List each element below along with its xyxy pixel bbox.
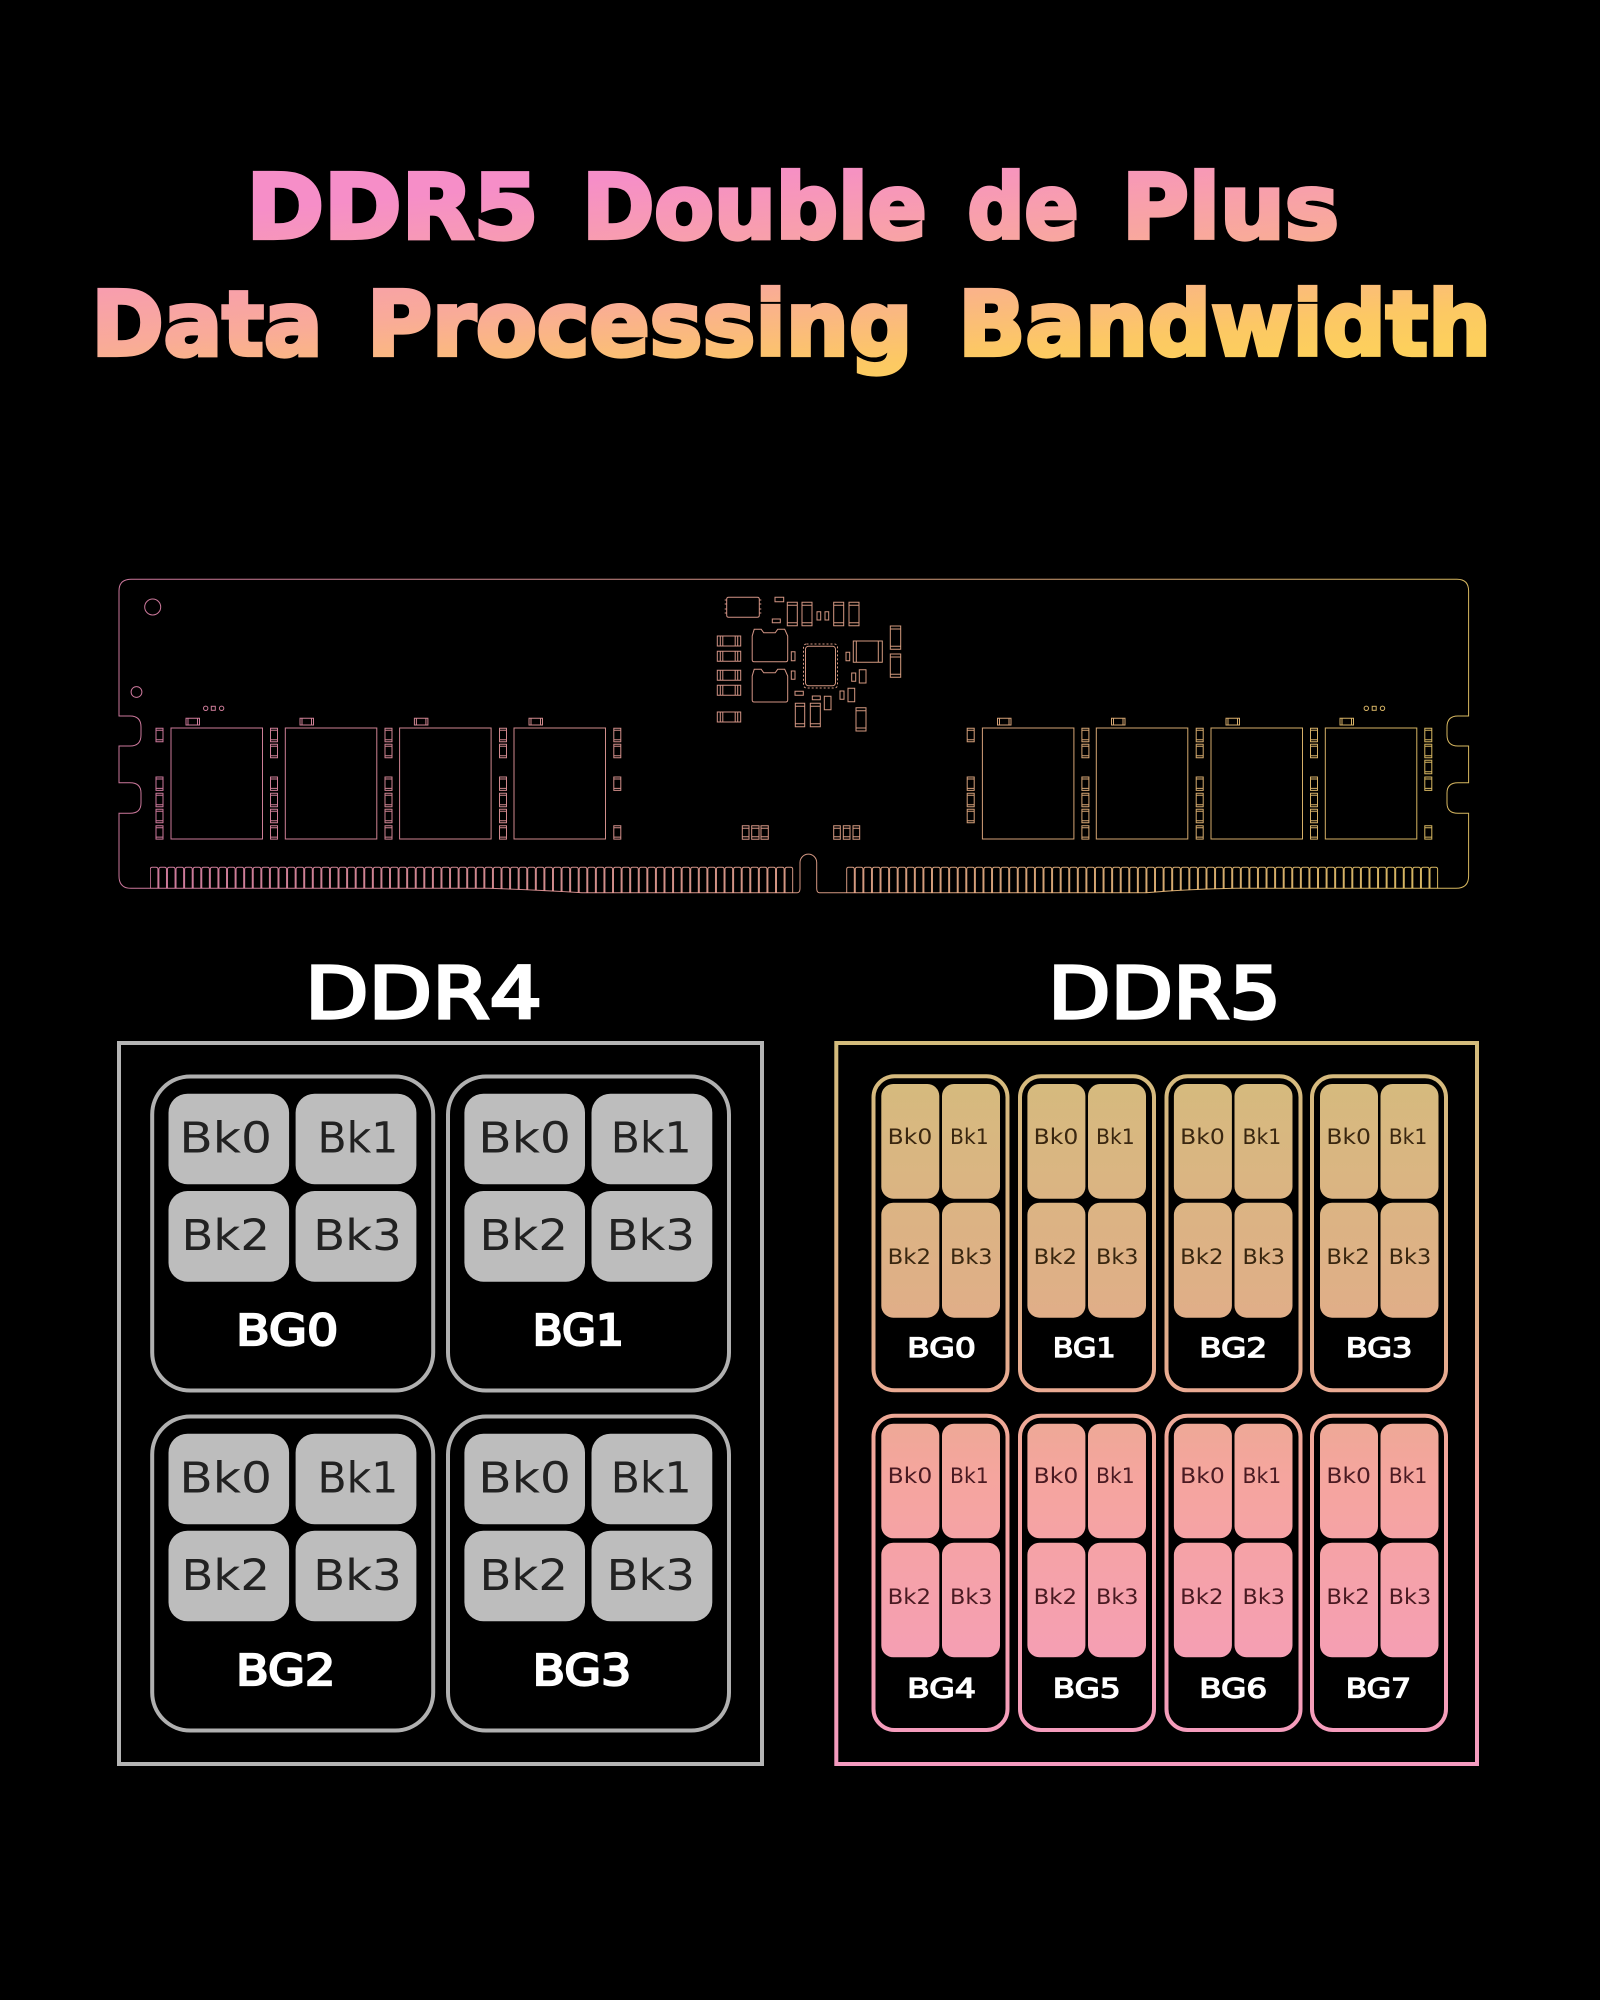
bank: Bk2: Bk2 <box>480 1552 568 1601</box>
label: BG2: BG2 <box>1199 1333 1267 1364</box>
bank: Bk0: Bk0 <box>1180 1125 1225 1150</box>
heading: DDR4: DDR4 <box>305 952 542 1035</box>
bank: Bk0: Bk0 <box>478 1115 571 1164</box>
bank: Bk1 <box>1234 1084 1292 1199</box>
bank: Bk1 <box>942 1424 1000 1538</box>
bank: Bk2 <box>881 1543 939 1657</box>
bank: Bk1 <box>1088 1424 1146 1538</box>
bank: Bk2 <box>881 1203 939 1318</box>
bank: Bk1 <box>592 1434 712 1524</box>
label: BG1: BG1 <box>533 1306 624 1356</box>
right fingers <box>847 867 1438 893</box>
bank: Bk0 <box>1174 1424 1232 1538</box>
power management circuit components <box>717 597 901 731</box>
bank: Bk2: Bk2 <box>1034 1245 1077 1270</box>
title line 2: Processing <box>367 272 912 376</box>
horizontal capacitors <box>717 636 741 722</box>
bank: Bk0 <box>1320 1424 1378 1538</box>
bank: Bk0: Bk0 <box>179 1115 272 1164</box>
PMIC chip <box>804 644 838 688</box>
title <box>92 155 1491 376</box>
label: BG5: BG5 <box>1053 1673 1121 1704</box>
bank: Bk0 <box>1027 1424 1085 1538</box>
right side capacitors <box>967 728 1432 839</box>
bank: Bk2: Bk2 <box>182 1212 270 1261</box>
bank: Bk2: Bk2 <box>1034 1585 1077 1610</box>
bank group: BG3 <box>1312 1076 1446 1390</box>
label: BG0: BG0 <box>236 1306 338 1356</box>
bank group: BG0 <box>152 1076 433 1390</box>
bank group: BG6 <box>1166 1416 1300 1730</box>
memory module outline diagram <box>119 579 1469 893</box>
bank: Bk3 <box>296 1191 416 1282</box>
bank: Bk1 <box>296 1094 416 1184</box>
bank: Bk3 <box>592 1191 712 1282</box>
label: BG0: BG0 <box>907 1333 976 1364</box>
bank: Bk2 <box>1174 1203 1232 1318</box>
title line 1 <box>246 155 1339 259</box>
bank: Bk1 <box>1088 1084 1146 1199</box>
large capacitor <box>853 641 882 662</box>
bank: Bk3: Bk3 <box>950 1245 992 1270</box>
bank: Bk2 <box>464 1531 585 1621</box>
bank: Bk3 <box>1380 1203 1438 1318</box>
bank: Bk1 <box>296 1434 416 1524</box>
bank: Bk2: Bk2 <box>1180 1585 1224 1610</box>
bank: Bk3 <box>1380 1543 1438 1657</box>
bank: Bk3: Bk3 <box>1096 1245 1138 1270</box>
DDR4 frame <box>119 1043 762 1764</box>
bank: Bk3: Bk3 <box>1096 1585 1138 1610</box>
bank: Bk2 <box>168 1191 289 1282</box>
label: BG2: BG2 <box>236 1646 335 1696</box>
panel: DDR4 <box>119 952 762 1764</box>
bank: Bk2: Bk2 <box>888 1245 931 1270</box>
bank: Bk3: Bk3 <box>1242 1585 1285 1610</box>
bank: Bk1: Bk1 <box>1242 1125 1281 1150</box>
bank: Bk1: Bk1 <box>1389 1125 1427 1150</box>
bank group: BG0 <box>874 1076 1008 1390</box>
bank group: BG7 <box>1312 1416 1446 1730</box>
bank: Bk3 <box>296 1531 416 1621</box>
test point dots <box>204 706 1385 710</box>
bank: Bk2: Bk2 <box>1180 1245 1224 1270</box>
DDR5 frame <box>836 1043 1477 1764</box>
heading: DDR5: DDR5 <box>1048 952 1281 1035</box>
bank: Bk3 <box>1234 1203 1292 1318</box>
bank: Bk3: Bk3 <box>607 1552 695 1601</box>
title line 2 <box>92 272 1491 376</box>
bank: Bk3 <box>942 1543 1000 1657</box>
small passives <box>772 597 866 710</box>
bank: Bk0: Bk0 <box>1034 1464 1078 1489</box>
bank group: BG5 <box>1020 1416 1154 1730</box>
bank: Bk1: Bk1 <box>611 1455 692 1504</box>
bank: Bk0: Bk0 <box>1034 1125 1078 1150</box>
bank: Bk0 <box>881 1084 939 1199</box>
bank group: BG1 <box>1020 1076 1154 1390</box>
bank: Bk0 <box>168 1094 289 1184</box>
bank: Bk0 <box>464 1434 585 1524</box>
bank: Bk1 <box>1380 1424 1438 1538</box>
left memory chips <box>171 728 606 839</box>
mounting holes <box>131 599 161 697</box>
bank: Bk1: Bk1 <box>1389 1464 1427 1489</box>
bank: Bk2 <box>1174 1543 1232 1657</box>
tall capacitors <box>787 602 901 731</box>
bank: Bk0: Bk0 <box>1326 1464 1371 1489</box>
right memory chips <box>982 728 1417 839</box>
bank: Bk0 <box>168 1434 289 1524</box>
gold contact fingers <box>150 867 1438 893</box>
bank: Bk3: Bk3 <box>1389 1585 1431 1610</box>
bank group: BG2 <box>1166 1076 1300 1390</box>
panel: DDR5 <box>836 952 1477 1764</box>
PCB board outline <box>119 579 1469 893</box>
bank: Bk2 <box>1320 1543 1378 1657</box>
title line 2: Bandwidth <box>958 272 1491 376</box>
bank: Bk3: Bk3 <box>313 1552 402 1601</box>
bank: Bk0: Bk0 <box>888 1125 932 1150</box>
bank: Bk1 <box>942 1084 1000 1199</box>
bank: Bk0 <box>464 1094 585 1184</box>
label: BG1: BG1 <box>1053 1333 1116 1364</box>
bank: Bk0: Bk0 <box>478 1455 571 1504</box>
label: BG3: BG3 <box>533 1646 631 1696</box>
bottom resistor arrays <box>742 826 860 839</box>
bank group: BG2 <box>152 1416 433 1730</box>
bank: Bk2: Bk2 <box>182 1552 270 1601</box>
bank group: BG3 <box>448 1416 729 1730</box>
bank: Bk0: Bk0 <box>179 1455 272 1504</box>
bank: Bk1: Bk1 <box>1242 1464 1281 1489</box>
bank: Bk2 <box>168 1531 289 1621</box>
left fingers <box>150 867 793 893</box>
bank: Bk2: Bk2 <box>480 1212 568 1261</box>
bank: Bk1: Bk1 <box>950 1125 989 1150</box>
bank: Bk2 <box>464 1191 585 1282</box>
bank: Bk0: Bk0 <box>1180 1464 1225 1489</box>
left side capacitors <box>156 728 621 839</box>
bank: Bk1: Bk1 <box>1096 1125 1135 1150</box>
bank: Bk1: Bk1 <box>611 1115 692 1164</box>
label: BG4: BG4 <box>907 1673 976 1704</box>
bank: Bk3: Bk3 <box>607 1212 695 1261</box>
bank: Bk3 <box>1088 1543 1146 1657</box>
bank: Bk2 <box>1027 1203 1085 1318</box>
title line 1: Plus <box>1122 155 1339 259</box>
bank: Bk1: Bk1 <box>318 1115 398 1164</box>
bank: Bk3: Bk3 <box>1242 1245 1285 1270</box>
bank: Bk2 <box>1027 1543 1085 1657</box>
bank: Bk1 <box>592 1094 712 1184</box>
bank: Bk0 <box>1320 1084 1378 1199</box>
bank: Bk0 <box>1174 1084 1232 1199</box>
bank: Bk3: Bk3 <box>950 1585 992 1610</box>
title line 1: de <box>968 155 1078 259</box>
label: BG7: BG7 <box>1346 1673 1411 1704</box>
title line 1: DDR5 <box>246 155 538 259</box>
bank: Bk0 <box>881 1424 939 1538</box>
capacitors above chips <box>186 718 1354 725</box>
bank: Bk1: Bk1 <box>1096 1464 1135 1489</box>
bank: Bk3: Bk3 <box>313 1212 402 1261</box>
bank: Bk3 <box>592 1531 712 1621</box>
bank: Bk2: Bk2 <box>1326 1585 1370 1610</box>
bank: Bk3: Bk3 <box>1389 1245 1431 1270</box>
bank group: BG4 <box>874 1416 1008 1730</box>
bank: Bk3 <box>1234 1543 1292 1657</box>
bank: Bk0 <box>1027 1084 1085 1199</box>
bank: Bk2: Bk2 <box>888 1585 931 1610</box>
label: BG3: BG3 <box>1346 1333 1412 1364</box>
bank: Bk3 <box>1088 1203 1146 1318</box>
bank: Bk1 <box>1234 1424 1292 1538</box>
label: BG6: BG6 <box>1199 1673 1267 1704</box>
bank: Bk1: Bk1 <box>318 1455 398 1504</box>
SPD hub IC <box>725 597 761 617</box>
bank: Bk1 <box>1380 1084 1438 1199</box>
bank: Bk2 <box>1320 1203 1378 1318</box>
title line 1: Double <box>582 155 927 259</box>
bank: Bk0: Bk0 <box>1326 1125 1371 1150</box>
bank: Bk2: Bk2 <box>1326 1245 1370 1270</box>
power inductors <box>752 629 788 702</box>
bank: Bk3 <box>942 1203 1000 1318</box>
bank: Bk0: Bk0 <box>888 1464 932 1489</box>
bank: Bk1: Bk1 <box>950 1464 989 1489</box>
bank group: BG1 <box>448 1076 729 1390</box>
title line 2: Data <box>92 272 322 376</box>
